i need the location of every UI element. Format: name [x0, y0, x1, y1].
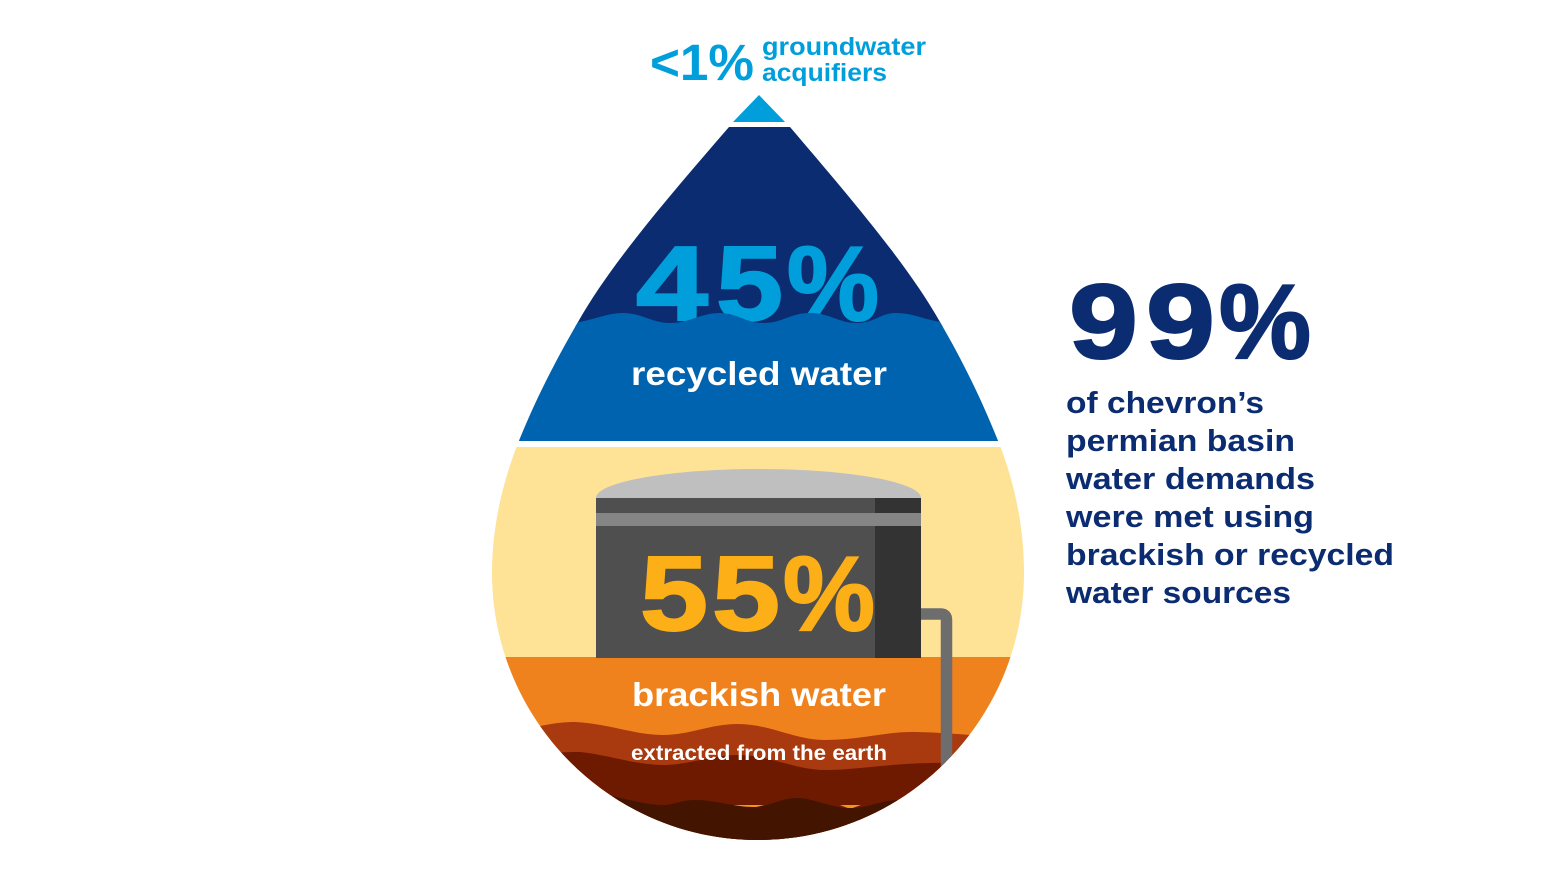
- ground layer: rust: [540, 722, 970, 840]
- icon: groundwater drop tip: [733, 95, 785, 122]
- number: 99%: [1069, 263, 1311, 381]
- number: 55%: 5: [712, 535, 780, 653]
- tank band: [596, 513, 921, 526]
- tank shadow side: [875, 498, 921, 658]
- callout: groundwater: [650, 33, 926, 91]
- text block: description: water sources: [1065, 575, 1291, 610]
- navy drop section: [575, 127, 943, 327]
- label: groundwater acquifers: [762, 33, 926, 87]
- water with wave surface: [510, 313, 1010, 441]
- text block: description: brackish or recycled: [1066, 537, 1394, 572]
- number: less than 1%: <1%: [650, 34, 754, 91]
- tank body: [596, 498, 921, 658]
- ore slivers: [734, 805, 861, 808]
- ground layer: dark brown: [561, 752, 945, 840]
- text block: description: were met using: [1065, 499, 1314, 534]
- tank roof: [596, 469, 921, 498]
- panel: recycled water: [518, 127, 998, 441]
- sky background: [480, 447, 1040, 658]
- number: 45%: %: [787, 225, 879, 343]
- icon: storage tank: [596, 469, 921, 658]
- number: 45%: 5: [716, 225, 783, 343]
- text block: description: permian basin: [1066, 423, 1295, 458]
- ground layer: orange: [506, 657, 1010, 840]
- number: 99%: 9: [1069, 263, 1138, 381]
- label: brackish water: brackish water: [632, 676, 886, 713]
- text block: description: of chevron’s: [1066, 385, 1264, 420]
- number: 99%: %: [1219, 263, 1311, 381]
- number: 55%: [640, 535, 875, 653]
- label: groundwater acquifers: acquifiers: [762, 59, 887, 87]
- text block: description: water demands: [1065, 461, 1315, 496]
- number: 45%: [636, 225, 879, 343]
- callout: 99% statistic: [1065, 263, 1394, 610]
- number: 55%: 5: [640, 535, 708, 653]
- panel: brackish water: [480, 447, 1040, 850]
- pipe: [921, 614, 946, 790]
- ground layer: deepest: [612, 796, 898, 840]
- number: 99%: 9: [1146, 263, 1215, 381]
- number: 45%: 4: [636, 225, 708, 343]
- text block: description: [1065, 385, 1394, 610]
- number: 55%: %: [783, 535, 875, 653]
- label: recycled water: recycled water: [631, 355, 887, 392]
- label: extracted from the earth: extracted from the earth: [631, 742, 887, 765]
- label: groundwater acquifers: groundwater: [762, 33, 926, 61]
